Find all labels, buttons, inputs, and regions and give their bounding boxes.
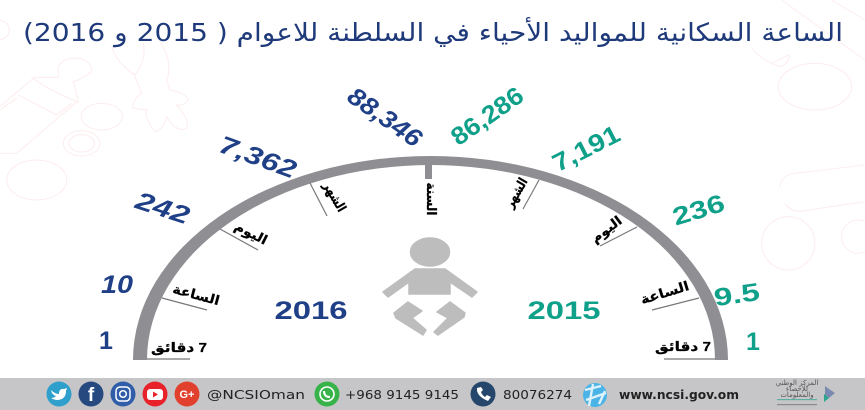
year tick: [425, 164, 432, 179]
2016 values: 10: [101, 271, 133, 299]
icon: google plus: G+: [180, 389, 194, 401]
icon: facebook: f: [88, 385, 95, 406]
period labels right: اليوم: [588, 213, 625, 247]
2015 values: 7,191: [548, 120, 625, 178]
footer bar: [0, 378, 865, 410]
year label 2016: 2016: [274, 297, 348, 325]
period labels right: الساعة: [639, 278, 691, 307]
2016 values: 242: [131, 186, 193, 230]
period labels left: الشهر: [320, 178, 349, 214]
2016 values: 7,362: [215, 131, 300, 184]
2016 values: 1: [99, 327, 113, 355]
2015 values: 1: [746, 328, 760, 356]
tick marks: [147, 180, 715, 359]
title: الساعة السكانية للمواليد الأحياء في السلطنة للاعوام ( 2015 و 2016): [23, 16, 843, 48]
period labels left: 7 دقائق: [151, 340, 207, 355]
icon: youtube: [142, 382, 168, 406]
hotline number: 80076274: [503, 387, 572, 402]
year label 2015: 2015: [528, 297, 601, 325]
period labels left: اليوم: [232, 218, 270, 249]
2015 values: 236: [669, 189, 728, 231]
2015 values: 86,286: [446, 81, 529, 151]
icon: baby: [383, 238, 477, 335]
icon: whatsapp: [314, 382, 340, 406]
period labels right: [501, 175, 711, 354]
logo: NCSI: والمعلومات: [780, 391, 814, 399]
social handle: @NCSIOman: [207, 387, 305, 402]
2016 values: [99, 82, 428, 355]
icon: phone: [470, 382, 496, 406]
2015 values: 9.5: [712, 278, 762, 312]
logo: NCSI: للإحصاء: [786, 385, 808, 393]
phone number: +968 9145 9145: [345, 387, 459, 402]
period label year: السنة: [423, 182, 438, 216]
website: www.ncsi.gov.om: [619, 387, 739, 402]
icon: globe: [583, 383, 607, 407]
period labels left: [151, 178, 349, 355]
icon: twitter: [46, 382, 72, 406]
logo: NCSI: المركز الوطني: [776, 379, 818, 387]
2015 values: [446, 81, 762, 356]
icon: instagram: [110, 382, 136, 406]
logo: NCSI: [776, 379, 835, 405]
gauge arc: [133, 156, 728, 360]
2016 values: 88,346: [342, 82, 428, 154]
period labels right: الشهر: [501, 175, 531, 211]
period labels right: 7 دقائق: [655, 339, 711, 354]
icon: google plus: [174, 382, 200, 406]
period labels left: الساعة: [171, 281, 221, 308]
icon: facebook: [78, 382, 104, 406]
